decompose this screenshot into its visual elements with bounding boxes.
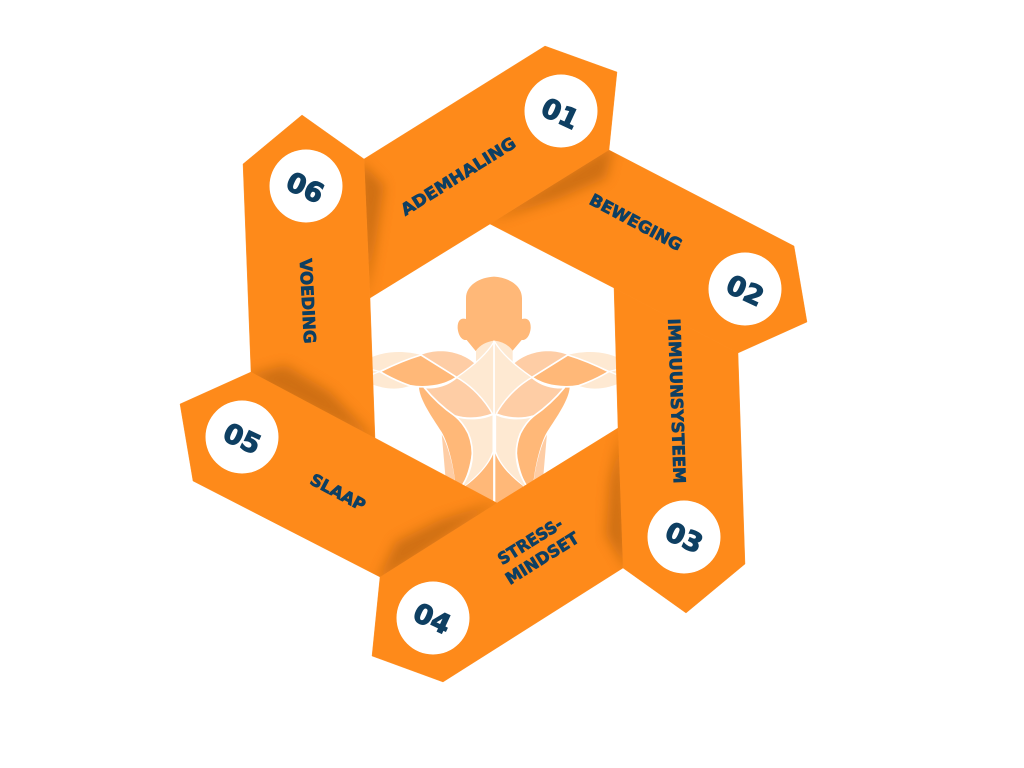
fold shadow on band 04 bbox=[606, 428, 628, 572]
right muscles bbox=[495, 341, 625, 510]
number circle 06 bbox=[270, 150, 342, 222]
fold shadow on band 02 bbox=[498, 150, 617, 220]
label stress: STRESS- bbox=[494, 514, 566, 569]
number 06: 06 bbox=[281, 166, 328, 210]
band 06: voeding bbox=[243, 115, 380, 444]
number circle 01 bbox=[524, 74, 598, 148]
number 03: 03 bbox=[660, 516, 707, 560]
illustration: human back muscles bbox=[363, 277, 625, 510]
band 01: ademhaling bbox=[358, 46, 617, 300]
left muscles bbox=[363, 341, 494, 510]
fold shadow on band 01 bbox=[364, 162, 388, 286]
number 05: 05 bbox=[218, 417, 265, 461]
number 01: 01 bbox=[536, 92, 583, 136]
label immuunsysteem: IMMUUNSYSTEEM bbox=[664, 318, 689, 484]
band 03: immuunsysteem bbox=[614, 288, 745, 613]
fold shadow on band 05 bbox=[376, 500, 494, 577]
fold shadow on band 06 bbox=[251, 361, 374, 437]
number circle 04 bbox=[396, 582, 470, 654]
label voeding: VOEDING bbox=[296, 258, 319, 344]
label mindset: MINDSET bbox=[502, 528, 583, 588]
label beweging: BEWEGING bbox=[586, 190, 685, 255]
spine bbox=[491, 341, 496, 503]
band 04: stress-mindset bbox=[372, 428, 628, 682]
band 02: beweging bbox=[486, 144, 807, 353]
number circle 03 bbox=[648, 500, 720, 574]
band 05: slaap bbox=[180, 372, 502, 584]
head and ears bbox=[458, 277, 531, 351]
number 02: 02 bbox=[721, 269, 768, 313]
number circle 05 bbox=[206, 400, 278, 474]
number 04: 04 bbox=[408, 597, 455, 641]
label slaap: SLAAP bbox=[307, 470, 369, 515]
number circle 02 bbox=[708, 252, 782, 326]
label ademhaling: ADEMHALING bbox=[397, 133, 519, 219]
